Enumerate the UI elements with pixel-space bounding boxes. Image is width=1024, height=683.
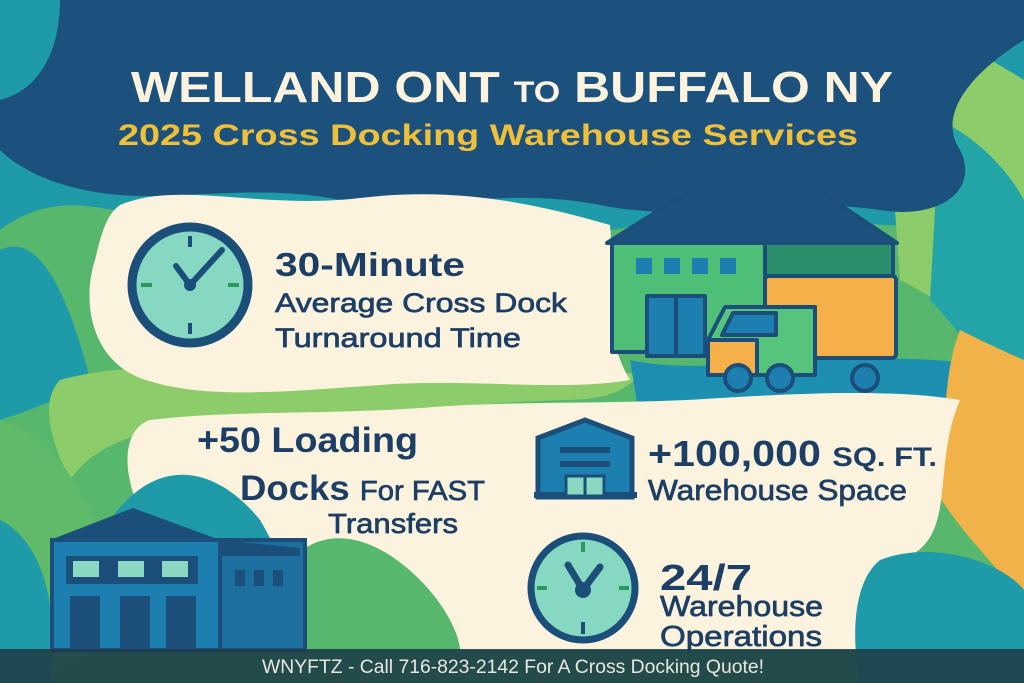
text: loading docks: Docks For FAST — [240, 469, 485, 508]
text: 24/7 operations: Warehouse — [660, 591, 823, 623]
footer bar — [0, 649, 1024, 683]
text: 24/7 operations: 24/7 — [660, 557, 752, 598]
text: loading docks: Transfers — [328, 508, 458, 539]
text: 24/7 operations — [660, 557, 823, 653]
text: 24/7 operations: Operations — [660, 621, 822, 653]
text: warehouse space: +100,000 SQ. FT. — [648, 433, 937, 474]
text: warehouse space: Warehouse Space — [648, 475, 907, 507]
text: 30-minute turnaround: 30-Minute — [275, 246, 465, 283]
text: 30-minute turnaround: Turnaround Time — [275, 323, 521, 353]
illustration: bottom-left warehouse — [50, 508, 305, 650]
icon: warehouse space — [534, 420, 637, 498]
icon: clock 24/7 — [531, 536, 635, 640]
text: loading docks: +50 Loading — [197, 421, 418, 460]
cream middle blob — [89, 194, 630, 392]
illustration: warehouse and truck — [607, 189, 897, 391]
text: 30-minute turnaround: Average Cross Dock — [275, 288, 568, 318]
top dark blob — [0, 0, 1024, 212]
footer bar: WNYFTZ - Call 716-823-2142 For A Cross Docking Quote! — [262, 657, 764, 678]
text: warehouse space — [648, 433, 937, 507]
title: WELLAND ONT TO BUFFALO NY — [131, 63, 893, 112]
subtitle: 2025 Cross Docking Warehouse Services — [118, 119, 858, 152]
icon: clock 30 minute — [132, 227, 248, 343]
text: loading docks — [197, 421, 485, 539]
text: 30-minute turnaround — [275, 246, 568, 353]
